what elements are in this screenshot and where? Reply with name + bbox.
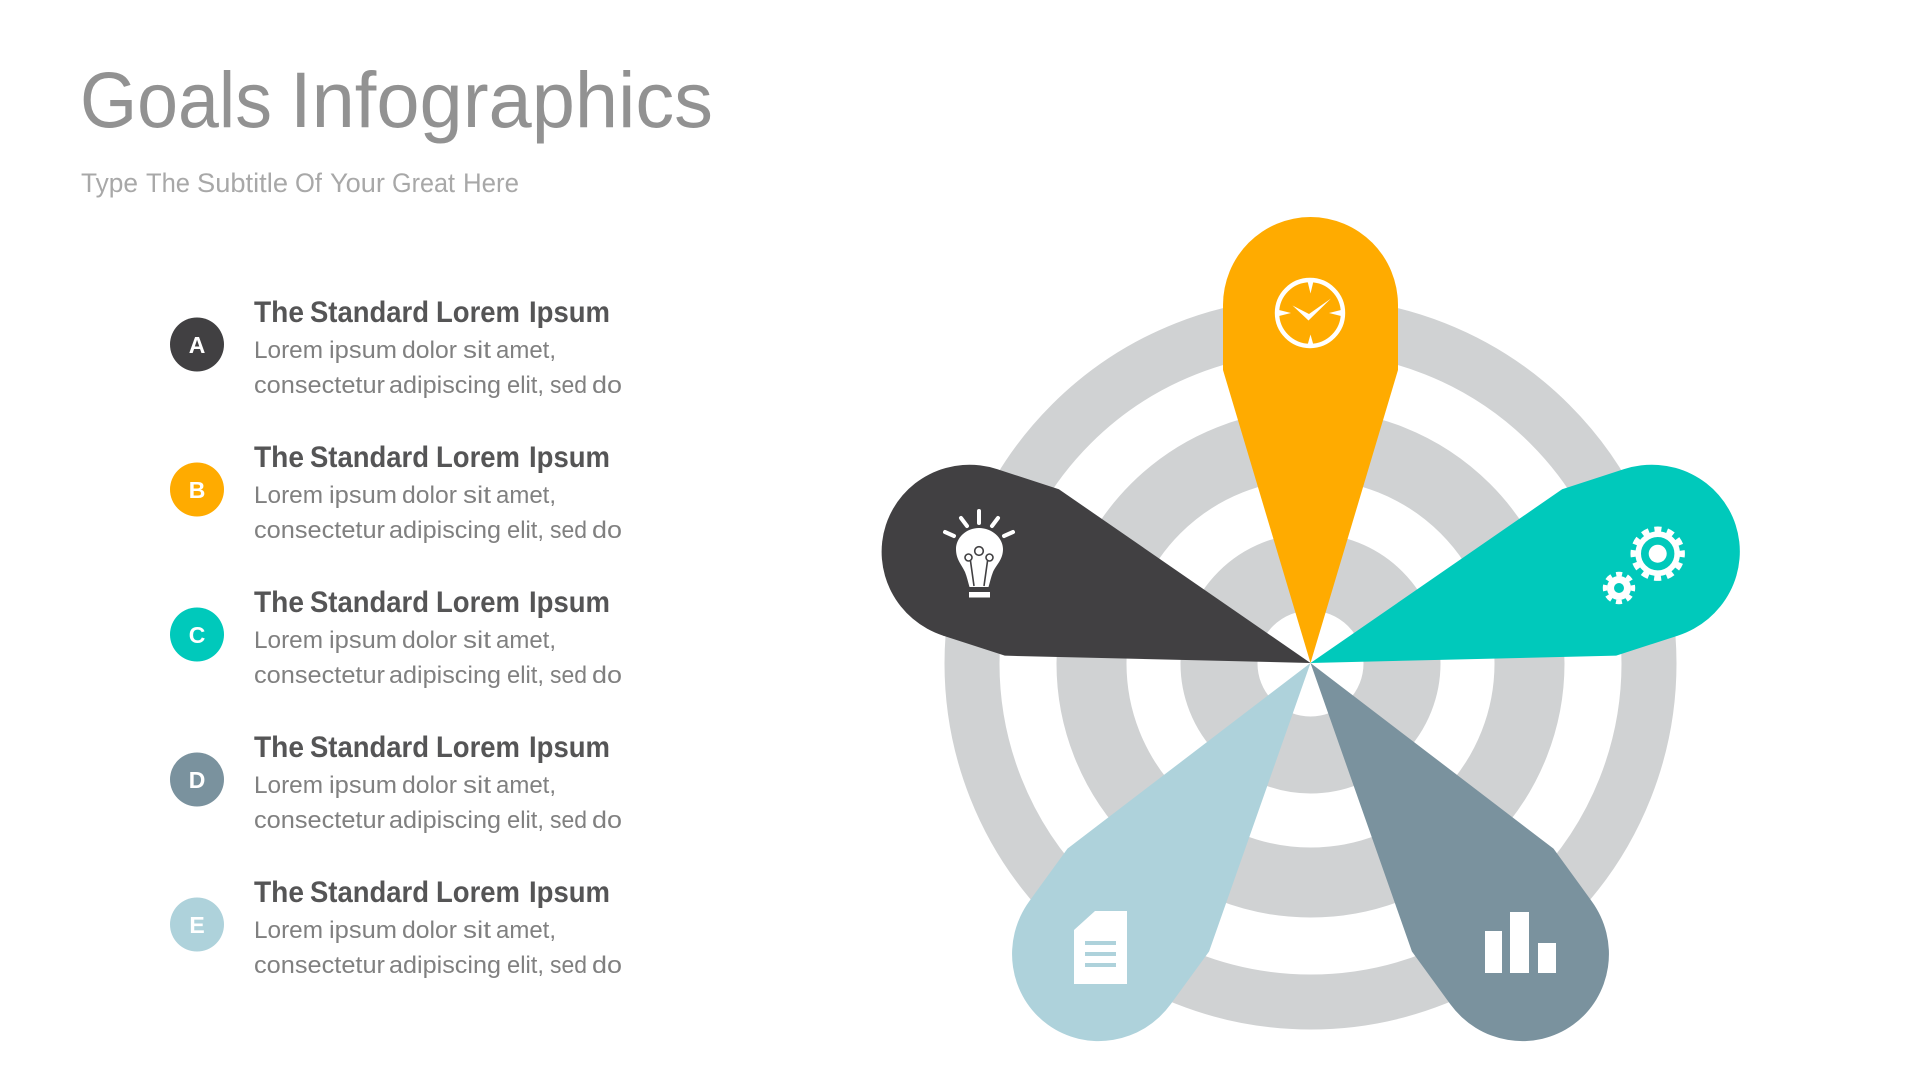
heading D: Standard: [310, 731, 429, 764]
list item C: [170, 586, 622, 689]
body B: amet,: [496, 482, 556, 509]
title: Goals: [80, 55, 272, 144]
body E: dolor: [402, 917, 457, 944]
body C: elit,: [507, 662, 544, 689]
body C: adipiscing: [389, 662, 501, 689]
body E: adipiscing: [389, 952, 501, 979]
body E: sed: [550, 952, 587, 979]
heading D: Ipsum: [529, 731, 610, 764]
body B: consectetur: [254, 517, 385, 544]
petal A: dark: [859, 442, 1338, 746]
body A: consectetur: [254, 372, 385, 399]
heading E: Standard: [310, 876, 429, 909]
list item B: [170, 441, 622, 544]
body C: ipsum: [329, 627, 397, 654]
letter E: E: [189, 912, 205, 938]
body B: sit: [463, 482, 491, 509]
body D: dolor: [402, 772, 457, 799]
petal E: light blue: [977, 612, 1381, 1076]
body C: [254, 627, 622, 689]
body D: adipiscing: [389, 807, 501, 834]
body B: dolor: [402, 482, 457, 509]
body B: elit,: [507, 517, 544, 544]
letter C: C: [189, 622, 205, 648]
heading D: Lorem: [436, 731, 520, 764]
heading C: Lorem: [436, 586, 520, 619]
subtitle: Great: [392, 168, 455, 198]
heading C: Ipsum: [529, 586, 610, 619]
badge B: [170, 462, 224, 516]
subtitle: Subtitle: [197, 168, 288, 198]
petal D: slate: [1240, 612, 1644, 1076]
body C: sit: [463, 627, 491, 654]
body D: Lorem: [254, 772, 323, 799]
body B: [254, 482, 622, 544]
body A: ipsum: [329, 337, 397, 364]
body A: [254, 337, 622, 399]
body E: [254, 917, 622, 979]
heading A: Ipsum: [529, 296, 610, 329]
heading A: Standard: [310, 296, 429, 329]
list item A: [170, 296, 622, 399]
body E: elit,: [507, 952, 544, 979]
body D: ipsum: [329, 772, 397, 799]
subtitle: Type: [81, 168, 138, 198]
body A: Lorem: [254, 337, 323, 364]
body E: amet,: [496, 917, 556, 944]
body A: dolor: [402, 337, 457, 364]
icon: document: [1074, 911, 1127, 984]
body A: elit,: [507, 372, 544, 399]
concentric rings: [972, 325, 1649, 1002]
badge E: [170, 898, 224, 952]
icon: light bulb: [945, 511, 1013, 598]
heading A: Lorem: [436, 296, 520, 329]
body C: amet,: [496, 627, 556, 654]
icon: clock: [1277, 279, 1343, 347]
subtitle: The: [146, 168, 190, 198]
body E: ipsum: [329, 917, 397, 944]
body C: dolor: [402, 627, 457, 654]
icon: bar chart: [1485, 912, 1556, 973]
body A: sed: [550, 372, 587, 399]
heading E: The: [254, 876, 304, 909]
subtitle: Of: [295, 168, 322, 198]
heading D: The: [254, 731, 304, 764]
badge A: [170, 318, 224, 372]
body E: Lorem: [254, 917, 323, 944]
subtitle: Here: [463, 168, 519, 198]
heading C: Standard: [310, 586, 429, 619]
heading B: Ipsum: [529, 441, 610, 474]
heading A: The: [254, 296, 304, 329]
heading C: The: [254, 586, 304, 619]
body A: amet,: [496, 337, 556, 364]
heading E: Ipsum: [529, 876, 610, 909]
body D: consectetur: [254, 807, 385, 834]
body A: do: [592, 372, 622, 399]
body C: do: [592, 662, 622, 689]
body D: amet,: [496, 772, 556, 799]
badge D: [170, 752, 224, 806]
petal C: teal: [1283, 442, 1763, 746]
heading B: Standard: [310, 441, 429, 474]
list item D: [170, 731, 622, 834]
subtitle: Your: [330, 168, 385, 198]
heading E: Lorem: [436, 876, 520, 909]
body D: [254, 772, 622, 834]
body E: sit: [463, 917, 491, 944]
body B: ipsum: [329, 482, 397, 509]
body E: do: [592, 952, 622, 979]
petal B: orange: [1223, 217, 1398, 663]
body C: consectetur: [254, 662, 385, 689]
body D: do: [592, 807, 622, 834]
list item E: [170, 876, 622, 979]
body A: adipiscing: [389, 372, 501, 399]
body C: sed: [550, 662, 587, 689]
body B: Lorem: [254, 482, 323, 509]
body B: sed: [550, 517, 587, 544]
title: Infographics: [290, 55, 713, 144]
heading B: Lorem: [436, 441, 520, 474]
body E: consectetur: [254, 952, 385, 979]
letter B: B: [189, 477, 205, 503]
heading B: The: [254, 441, 304, 474]
letter D: D: [189, 767, 205, 793]
body C: Lorem: [254, 627, 323, 654]
body B: do: [592, 517, 622, 544]
body B: adipiscing: [389, 517, 501, 544]
body A: sit: [463, 337, 491, 364]
badge C: [170, 608, 224, 662]
body D: sed: [550, 807, 587, 834]
body D: elit,: [507, 807, 544, 834]
body D: sit: [463, 772, 491, 799]
icon: gears: [1605, 529, 1682, 602]
letter A: A: [189, 332, 205, 358]
